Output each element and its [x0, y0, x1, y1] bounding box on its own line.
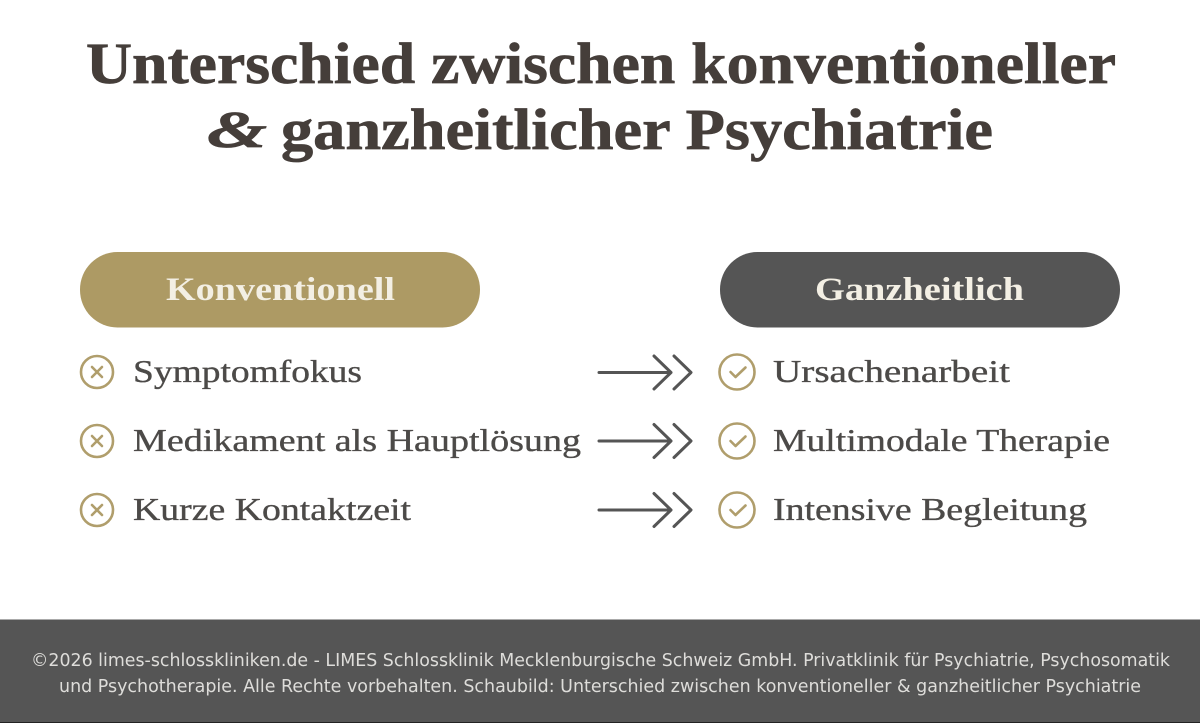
arrow 2	[599, 424, 691, 458]
footer	[0, 620, 1200, 723]
panel: Ganzheitlich header: Ganzheitlich	[815, 272, 1024, 308]
footer: und Psychotherapie. Alle Rechte vorbehalten. Schaubild: Unterschied zwischen konventioneller & ganzheitlicher Psychiatrie	[59, 676, 1141, 697]
row 2 right: Multimodale Therapie: Multimodale Therapie	[773, 422, 1110, 458]
row 2 left: Medikament als Hauptlösung: Medikament als Hauptlösung	[133, 422, 581, 458]
row 1 right: Ursachenarbeit: Ursachenarbeit	[773, 353, 1010, 389]
row 1 left: Symptomfokus: Symptomfokus	[133, 353, 362, 389]
arrow 1	[599, 356, 691, 389]
title: &	[207, 102, 267, 159]
row 1 left: Symptomfokus	[81, 353, 362, 389]
row 3 left: Kurze Kontaktzeit: Kurze Kontaktzeit	[133, 491, 411, 527]
panel: Konventionell header: Konventionell	[166, 272, 395, 308]
title: ganzheitlicher Psychiatrie	[281, 97, 993, 162]
panel: Ganzheitlich header	[720, 252, 1120, 328]
title: Unterschied zwischen konventioneller	[86, 31, 1116, 96]
arrow 3	[599, 494, 691, 526]
title	[86, 31, 1116, 162]
footer: ©2026 limes-schlosskliniken.de - LIMES Schlossklinik Mecklenburgische Schweiz GmbH. Privatklinik für Psychiatrie, Psychosomatik	[31, 650, 1171, 671]
row 1 right: Ursachenarbeit	[720, 353, 1010, 390]
row 3 right: Intensive Begleitung: Intensive Begleitung	[773, 491, 1087, 527]
panel: Konventionell header	[80, 252, 480, 328]
